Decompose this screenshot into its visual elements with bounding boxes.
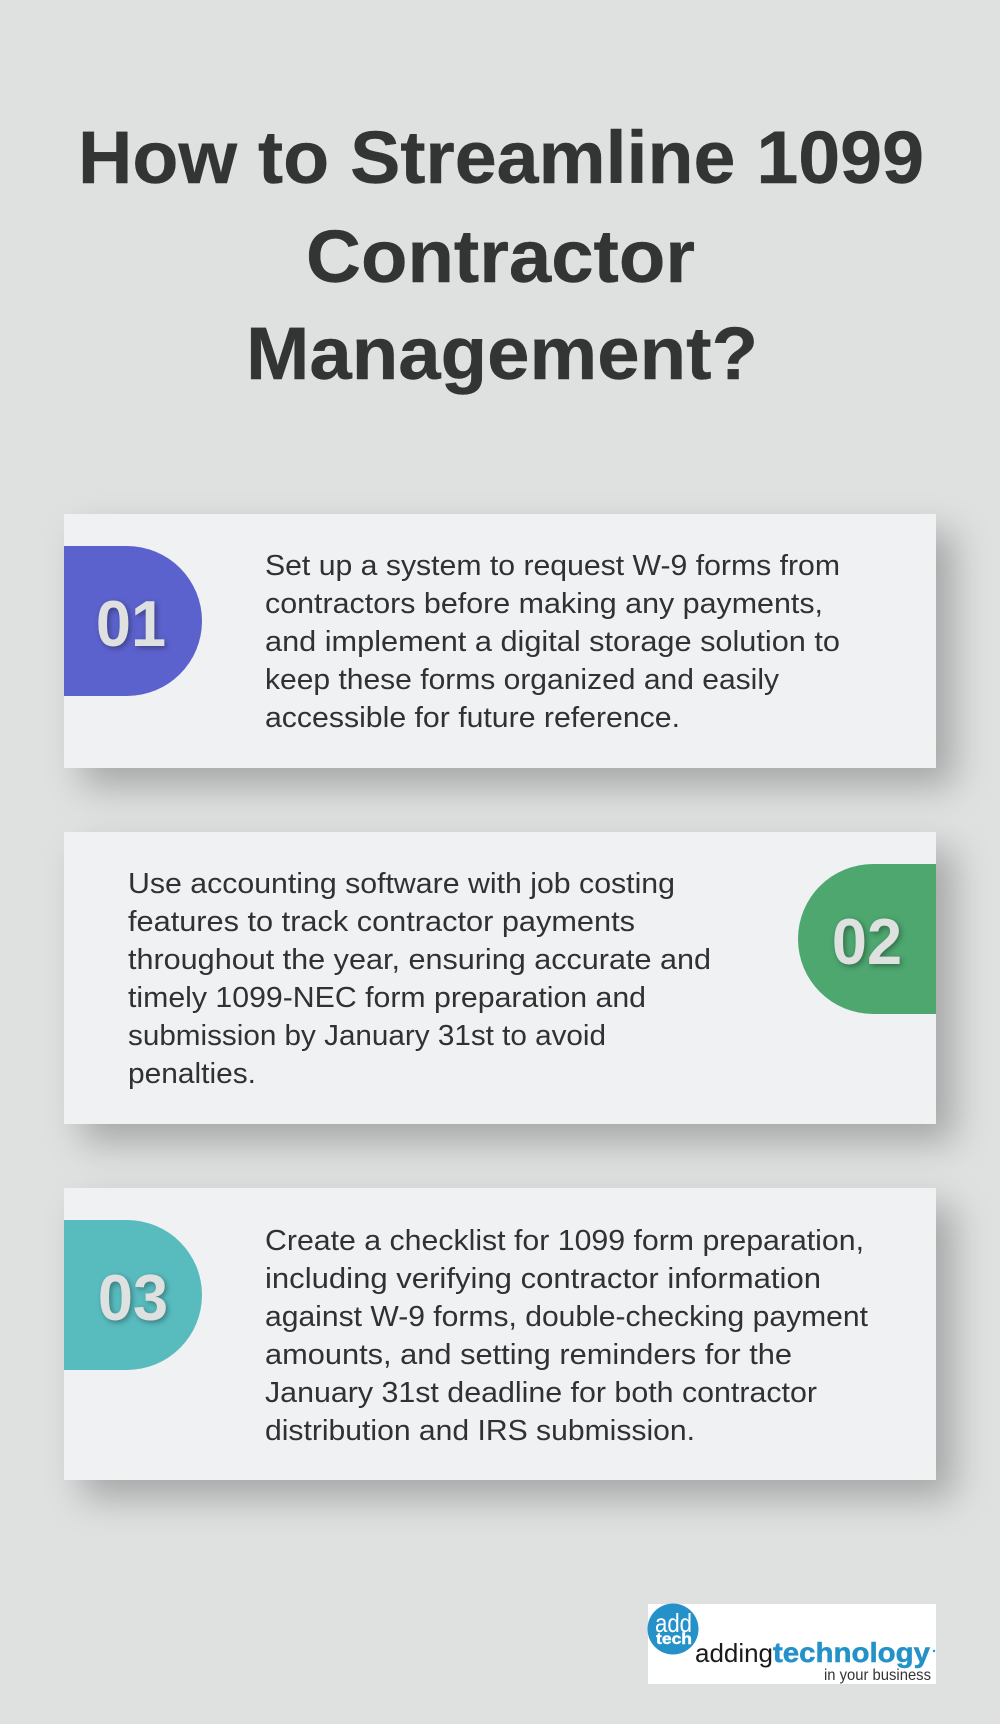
text: step 02 description: features to track contractor payments	[128, 906, 635, 938]
text: step 01 description: keep these forms organized and easily	[265, 664, 780, 696]
text: step 03 description: Create a checklist for 1099 form preparation,	[265, 1225, 864, 1257]
text: step 02 description: submission by January 31st to avoid	[128, 1020, 606, 1052]
badge: 02	[798, 864, 936, 1014]
panel: step 01	[64, 514, 936, 768]
text: step 03 description: amounts, and setting reminders for the	[265, 1339, 792, 1371]
text: step 01 description: Set up a system to request W-9 forms from	[265, 550, 840, 582]
text: step 02 description: throughout the year, ensuring accurate and	[128, 944, 711, 976]
panel: step 02	[64, 832, 936, 1124]
badge: 02: 02	[832, 905, 902, 978]
text: step 02 description: penalties.	[128, 1058, 256, 1090]
text: step 03 description: January 31st deadline for both contractor	[265, 1377, 818, 1409]
title: How to Streamline 1099	[78, 116, 924, 199]
text: step 01 description	[265, 550, 840, 734]
wordmark: in your business	[824, 1667, 931, 1684]
logo: adding technology	[648, 1604, 936, 1684]
text: step 03 description: including verifying contractor information	[265, 1263, 821, 1295]
badge: 03	[64, 1220, 202, 1370]
icon: add tech circle: tech	[656, 1631, 692, 1648]
text: step 03 description: distribution and IRS submission.	[265, 1415, 695, 1447]
text: step 02 description: timely 1099-NEC form preparation and	[128, 982, 646, 1014]
text: step 03 description: against W-9 forms, double-checking payment	[265, 1301, 868, 1333]
text: step 02 description: Use accounting software with job costing	[128, 868, 675, 900]
badge: 01: 01	[96, 587, 166, 660]
text: step 01 description: accessible for future reference.	[265, 702, 680, 734]
wordmark	[695, 1637, 935, 1684]
icon: add tech circle	[648, 1604, 698, 1654]
title	[78, 116, 924, 395]
text: step 01 description: contractors before making any payments,	[265, 588, 823, 620]
wordmark: adding	[695, 1638, 773, 1668]
text: step 03 description	[265, 1225, 868, 1447]
wordmark: technology	[773, 1637, 930, 1668]
title: Management?	[246, 312, 758, 395]
icon: add tech circle: add	[655, 1608, 692, 1638]
text: step 02 description	[128, 868, 711, 1090]
title: Contractor	[306, 215, 695, 298]
panel: step 03	[64, 1188, 936, 1480]
text: step 01 description: and implement a digital storage solution to	[265, 626, 840, 658]
badge: 01	[64, 546, 202, 696]
badge: 03: 03	[98, 1261, 168, 1334]
